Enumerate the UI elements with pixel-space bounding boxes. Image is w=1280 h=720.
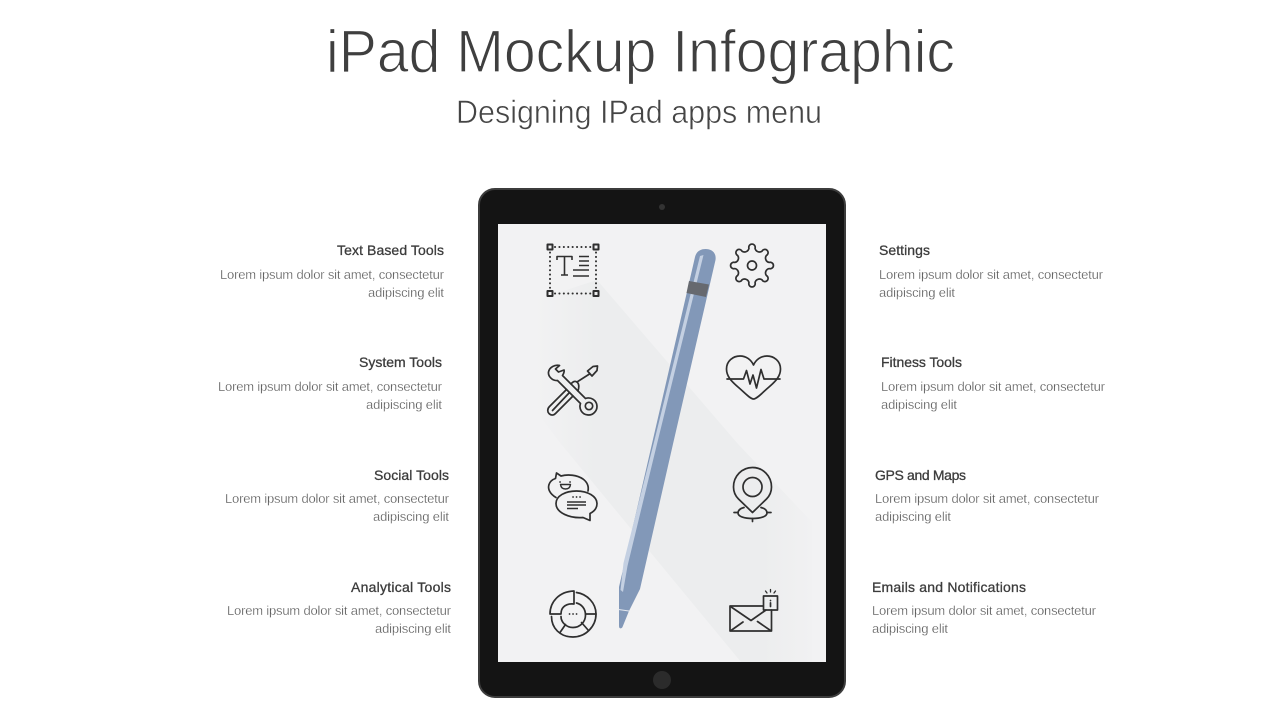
camera <box>659 204 665 210</box>
right text: Settings: Settings <box>879 242 930 258</box>
icon: map pin <box>734 468 772 522</box>
right text: Fitness Tools: adipiscing elit <box>881 397 957 412</box>
left text: Analytical Tools: adipiscing elit <box>375 621 451 636</box>
home button <box>653 671 671 689</box>
left text: System Tools: adipiscing elit <box>366 397 442 412</box>
pencil shadow <box>535 280 812 662</box>
icon: wrench and screwdriver <box>548 365 598 415</box>
subtitle: Designing IPad apps menu <box>456 94 822 130</box>
right text: Emails and Notifications: Emails and Notifications <box>872 579 1026 595</box>
right text: GPS and Maps: Lorem ipsum dolor sit amet, consectetur <box>875 491 1100 506</box>
title: iPad Mockup Infographic <box>326 18 955 85</box>
icon: text tool <box>548 244 598 296</box>
right text: Settings: adipiscing elit <box>879 285 955 300</box>
pencil highlight <box>620 255 704 592</box>
pencil body <box>619 249 716 628</box>
right text: GPS and Maps: adipiscing elit <box>875 509 951 524</box>
icon: chat bubbles <box>549 473 597 520</box>
left text: System Tools <box>218 354 443 412</box>
tablet screen <box>498 224 826 662</box>
right text: Fitness Tools <box>881 354 1106 412</box>
left text: Text Based Tools: adipiscing elit <box>368 285 444 300</box>
left text: Analytical Tools: Analytical Tools <box>351 579 451 595</box>
left text: Social Tools: Social Tools <box>374 467 449 483</box>
icon: mail notification <box>730 590 778 631</box>
tablet body <box>479 189 845 697</box>
right text: Fitness Tools: Lorem ipsum dolor sit amet, consectetur <box>881 379 1106 394</box>
left text: System Tools: System Tools <box>359 354 442 370</box>
right text: Emails and Notifications: adipiscing elit <box>872 621 948 636</box>
left text: Text Based Tools: Lorem ipsum dolor sit amet, consectetur <box>220 267 445 282</box>
left text: Analytical Tools <box>227 579 452 636</box>
right text: GPS and Maps: GPS and Maps <box>875 467 966 483</box>
left text: Social Tools: adipiscing elit <box>373 509 449 524</box>
left text: Social Tools: Lorem ipsum dolor sit amet, consectetur <box>225 491 450 506</box>
left text: Social Tools <box>225 467 450 524</box>
left text: Text Based Tools <box>220 242 445 300</box>
right text: Settings: Lorem ipsum dolor sit amet, consectetur <box>879 267 1104 282</box>
right text: Emails and Notifications <box>872 579 1097 636</box>
right text: GPS and Maps <box>875 467 1100 524</box>
pencil tip line <box>618 610 629 611</box>
right text: Emails and Notifications: Lorem ipsum dolor sit amet, consectetur <box>872 603 1097 618</box>
pencil band <box>686 281 709 297</box>
icon: donut chart <box>550 591 596 637</box>
left text: System Tools: Lorem ipsum dolor sit amet, consectetur <box>218 379 443 394</box>
left text: Text Based Tools: Text Based Tools <box>337 242 444 258</box>
right text: Settings <box>879 242 1104 300</box>
right text: Fitness Tools: Fitness Tools <box>881 354 962 370</box>
icon: heart with pulse <box>726 356 780 399</box>
icon: gear <box>731 244 773 287</box>
left text: Analytical Tools: Lorem ipsum dolor sit amet, consectetur <box>227 603 452 618</box>
pencil <box>618 249 716 628</box>
